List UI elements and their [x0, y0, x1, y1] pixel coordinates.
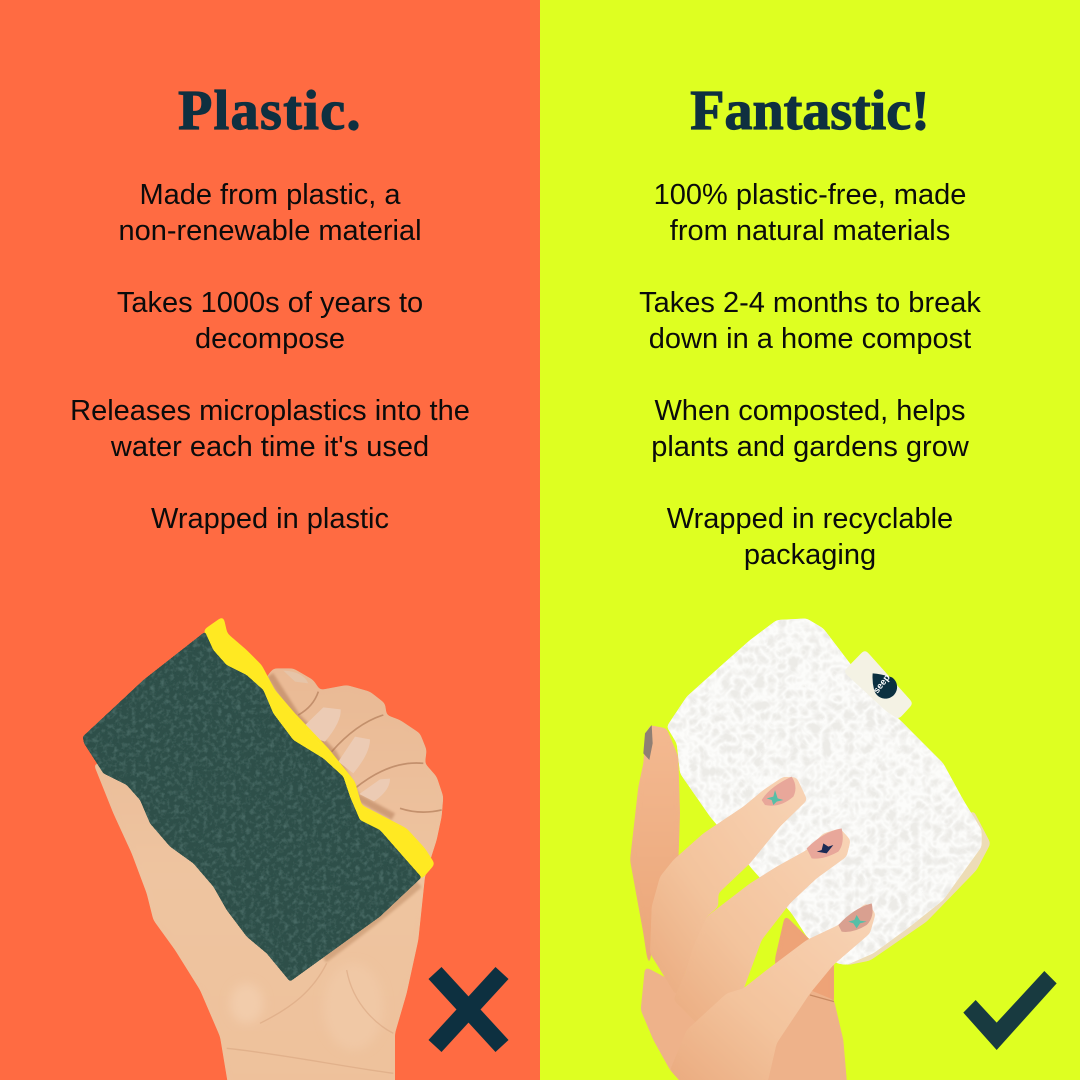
- text: packaging: [666, 503, 953, 571]
- text: packaging: Wrapped in recyclable: [667, 503, 953, 535]
- text: decomposition: down in a home compost: [649, 323, 971, 355]
- ring finger: [670, 903, 876, 1080]
- white sponge: [667, 618, 982, 965]
- hand: [93, 668, 443, 1080]
- heading: Plastic: Plastic.: [178, 80, 362, 142]
- tan sponge backing: [843, 810, 991, 966]
- panel: plastic: [0, 0, 540, 1080]
- back finger: [630, 725, 680, 973]
- text: microplastics: Releases microplastics into the: [70, 395, 470, 427]
- text: material: [654, 179, 966, 247]
- text: microplastics: [70, 395, 470, 463]
- middle finger: [673, 828, 851, 1037]
- text: composting: When composted, helps: [654, 395, 966, 427]
- finger behind sponge: [775, 915, 834, 1003]
- text: decomposition: decompose: [195, 323, 345, 355]
- tag: [843, 649, 913, 719]
- text: decomposition: Takes 2-4 months to break: [639, 287, 981, 319]
- text: material: from natural materials: [670, 215, 950, 247]
- icon: check mark: [963, 971, 1057, 1050]
- text: decomposition: Takes 1000s of years to: [117, 287, 423, 319]
- yellow sponge layer: [203, 616, 435, 879]
- panel: fantastic: [540, 0, 1080, 1080]
- text: packaging: packaging: [744, 539, 876, 571]
- tag: seep: [871, 672, 892, 695]
- text: microplastics: water each time it's used: [111, 431, 429, 463]
- text: material: 100% plastic-free, made: [654, 179, 966, 211]
- text: composting: [651, 395, 969, 463]
- text: material: [118, 179, 422, 247]
- green scourer layer: [83, 632, 422, 982]
- text: composting: plants and gardens grow: [651, 431, 969, 463]
- text: decomposition: [639, 287, 981, 355]
- heading: Fantastic: Fantastic!: [690, 80, 930, 142]
- painted nails: [643, 725, 873, 932]
- illustration: hand holding plastic sponge: [83, 618, 443, 1080]
- illustration: hand holding natural sponge: [630, 618, 990, 1080]
- palm: [641, 967, 847, 1080]
- text: decomposition: [117, 287, 423, 355]
- icon: cross: [428, 967, 508, 1052]
- index finger: [650, 777, 807, 997]
- text: packaging: Wrapped in plastic: [151, 503, 389, 535]
- text: material: Made from plastic, a: [139, 179, 401, 211]
- text: material: non-renewable material: [118, 215, 422, 247]
